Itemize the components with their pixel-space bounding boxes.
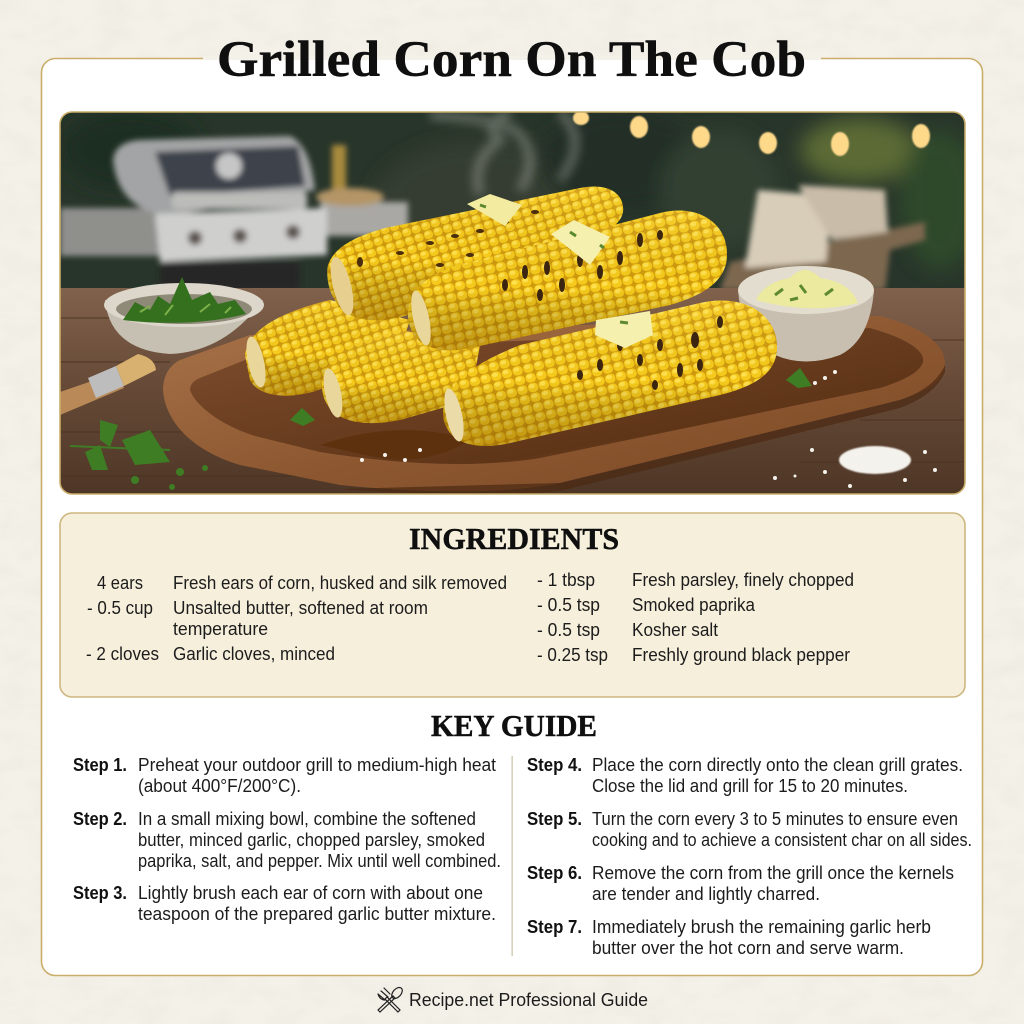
step 7: Step 7. (527, 917, 582, 937)
ingredients right column: Smoked paprika (632, 595, 756, 615)
step 2: In a small mixing bowl, combine the softened (138, 809, 476, 829)
back middle corn (320, 330, 480, 423)
front top corn (407, 211, 727, 350)
salt (360, 370, 937, 488)
ingredients right column: - 0.25 tsp (537, 645, 608, 665)
steps right column (527, 755, 972, 958)
ingredients left column: Unsalted butter, softened at room (173, 598, 428, 618)
step 4: Close the lid and grill for 15 to 20 minutes. (592, 776, 908, 796)
step 2: butter, minced garlic, chopped parsley, smoked (138, 830, 485, 850)
step 5: cooking and to achieve a consistent char on all sides. (592, 830, 972, 850)
step 3: Lightly brush each ear of corn with about one (138, 883, 483, 903)
footer text: Recipe.net Professional Guide (409, 990, 648, 1010)
string lights (573, 111, 930, 156)
patio chair and pillows (720, 185, 925, 290)
step 1 (73, 755, 496, 796)
step 6: Remove the corn from the grill once the kernels (592, 863, 954, 883)
step 3 (73, 883, 496, 924)
front corn (441, 301, 777, 446)
ingredients left column: Fresh ears of corn, husked and silk removed (173, 573, 507, 593)
parsley sprig and herbs (70, 368, 812, 490)
herb butter bowl (738, 266, 874, 362)
back left corn (243, 300, 410, 396)
ingredients right column: - 0.5 tsp (537, 620, 600, 640)
ingredients left column: temperature (173, 619, 268, 639)
step 1: Step 1. (73, 755, 127, 775)
ingredients right column: - 1 tbsp (537, 570, 595, 590)
ingredients left column: Garlic cloves, minced (173, 644, 335, 664)
step 6 (527, 863, 954, 904)
ingredients heading: INGREDIENTS (409, 521, 619, 556)
step 5 (527, 809, 972, 850)
step 5: Turn the corn every 3 to 5 minutes to ensure even (592, 809, 958, 829)
garden backdrop (60, 110, 980, 292)
step 4 (527, 755, 963, 796)
step 2 (73, 809, 501, 871)
photo frame (60, 112, 965, 494)
steps left column (73, 755, 501, 924)
ingredients right column: Freshly ground black pepper (632, 645, 850, 665)
top back corn (326, 187, 623, 320)
ingredients right column: Fresh parsley, finely chopped (632, 570, 854, 590)
brush (60, 354, 156, 415)
photo: grilled corn on wooden platter (60, 110, 980, 495)
step 7 (527, 917, 931, 958)
grill (60, 136, 408, 290)
step 2: Step 2. (73, 809, 127, 829)
ingredients left column (86, 573, 507, 664)
step 6: are tender and lightly charred. (592, 884, 820, 904)
ingredients left column: 4 ears (97, 573, 143, 593)
step 1: (about 400°F/200°C). (138, 776, 301, 796)
ingredients left column: - 2 cloves (86, 644, 159, 664)
ingredients right column: - 0.5 tsp (537, 595, 600, 615)
panel: ingredients (60, 513, 965, 697)
wooden platter (163, 316, 945, 495)
wooden table (60, 288, 965, 494)
ingredients left column: - 0.5 cup (87, 598, 153, 618)
parsley bowl (104, 277, 264, 354)
step 1: Preheat your outdoor grill to medium-high heat (138, 755, 496, 775)
ingredients right column (537, 570, 854, 665)
title: Grilled Corn On The Cob (217, 32, 806, 88)
step 6: Step 6. (527, 863, 582, 883)
step 3: Step 3. (73, 883, 127, 903)
ingredients right column: Kosher salt (632, 620, 718, 640)
step 2: paprika, salt, and pepper. Mix until well combined. (138, 851, 501, 871)
column divider (512, 756, 513, 956)
step 7: Immediately brush the remaining garlic herb (592, 917, 931, 937)
step 5: Step 5. (527, 809, 582, 829)
step 7: butter over the hot corn and serve warm. (592, 938, 904, 958)
butter pats (467, 194, 653, 348)
steam (430, 112, 575, 195)
step 4: Place the corn directly onto the clean grill grates. (592, 755, 963, 775)
step 4: Step 4. (527, 755, 582, 775)
key guide heading: KEY GUIDE (431, 708, 597, 743)
icon: fork and spoon (378, 985, 404, 1012)
step 3: teaspoon of the prepared garlic butter mixture. (138, 904, 496, 924)
